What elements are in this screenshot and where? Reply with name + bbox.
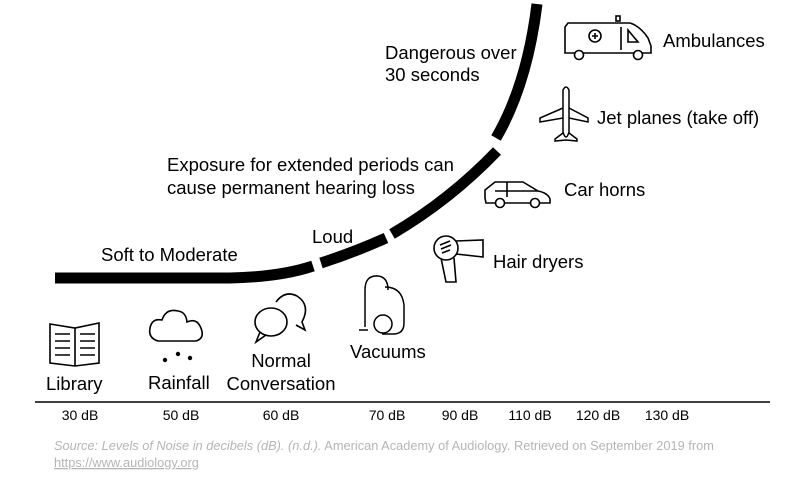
- dB labels: [62, 407, 689, 423]
- dB labels: 60 dB: [263, 407, 299, 423]
- icon: rain cloud: [150, 310, 202, 362]
- dB labels: 30 dB: [62, 407, 98, 423]
- icon: ambulance: [565, 16, 651, 60]
- axis line: [35, 401, 770, 403]
- icon: speech bubbles: [255, 294, 306, 342]
- icon: car: [485, 182, 550, 208]
- source text: https://www.audiology.org: [54, 455, 199, 470]
- label: ambulances: Ambulances: [663, 30, 765, 51]
- label: hair dryers: Hair dryers: [493, 251, 583, 272]
- label: car horns: Car horns: [564, 179, 645, 200]
- dB labels: 130 dB: [645, 407, 689, 423]
- icon: book: [50, 323, 99, 366]
- dB labels: 110 dB: [508, 407, 552, 423]
- label: jet planes: Jet planes (take off): [597, 107, 759, 128]
- dB labels: 50 dB: [163, 407, 199, 423]
- source text: [54, 438, 714, 470]
- label: normal conversation: Conversation: [226, 373, 336, 394]
- label: loud: Loud: [312, 226, 353, 247]
- source text: Source: Levels of Noise in decibels (dB). (n.d.). American Academy of Audiology. Retrieved on September 2019 from: [54, 438, 714, 453]
- dB labels: 70 dB: [369, 407, 405, 423]
- label: dangerous: Dangerous over: [385, 42, 517, 63]
- dB labels: 120 dB: [576, 407, 620, 423]
- label: library: Library: [46, 373, 103, 394]
- label: normal conversation: [226, 350, 336, 394]
- label: dangerous: [385, 42, 517, 85]
- label: soft to moderate: Soft to Moderate: [101, 244, 238, 265]
- label: exposure: cause permanent hearing loss: [167, 177, 415, 198]
- curve: noise level arc: [55, 4, 537, 278]
- label: dangerous: 30 seconds: [385, 64, 480, 85]
- dB labels: 90 dB: [442, 407, 478, 423]
- icon: hair dryer: [434, 236, 483, 282]
- label: exposure: [167, 154, 454, 198]
- icon: vacuum: [359, 276, 404, 334]
- label: vacuums: Vacuums: [350, 341, 426, 362]
- label: exposure: Exposure for extended periods can: [167, 154, 454, 175]
- icon: jet plane: [540, 87, 588, 141]
- label: normal conversation: Normal: [251, 350, 311, 371]
- label: rainfall: Rainfall: [148, 372, 210, 393]
